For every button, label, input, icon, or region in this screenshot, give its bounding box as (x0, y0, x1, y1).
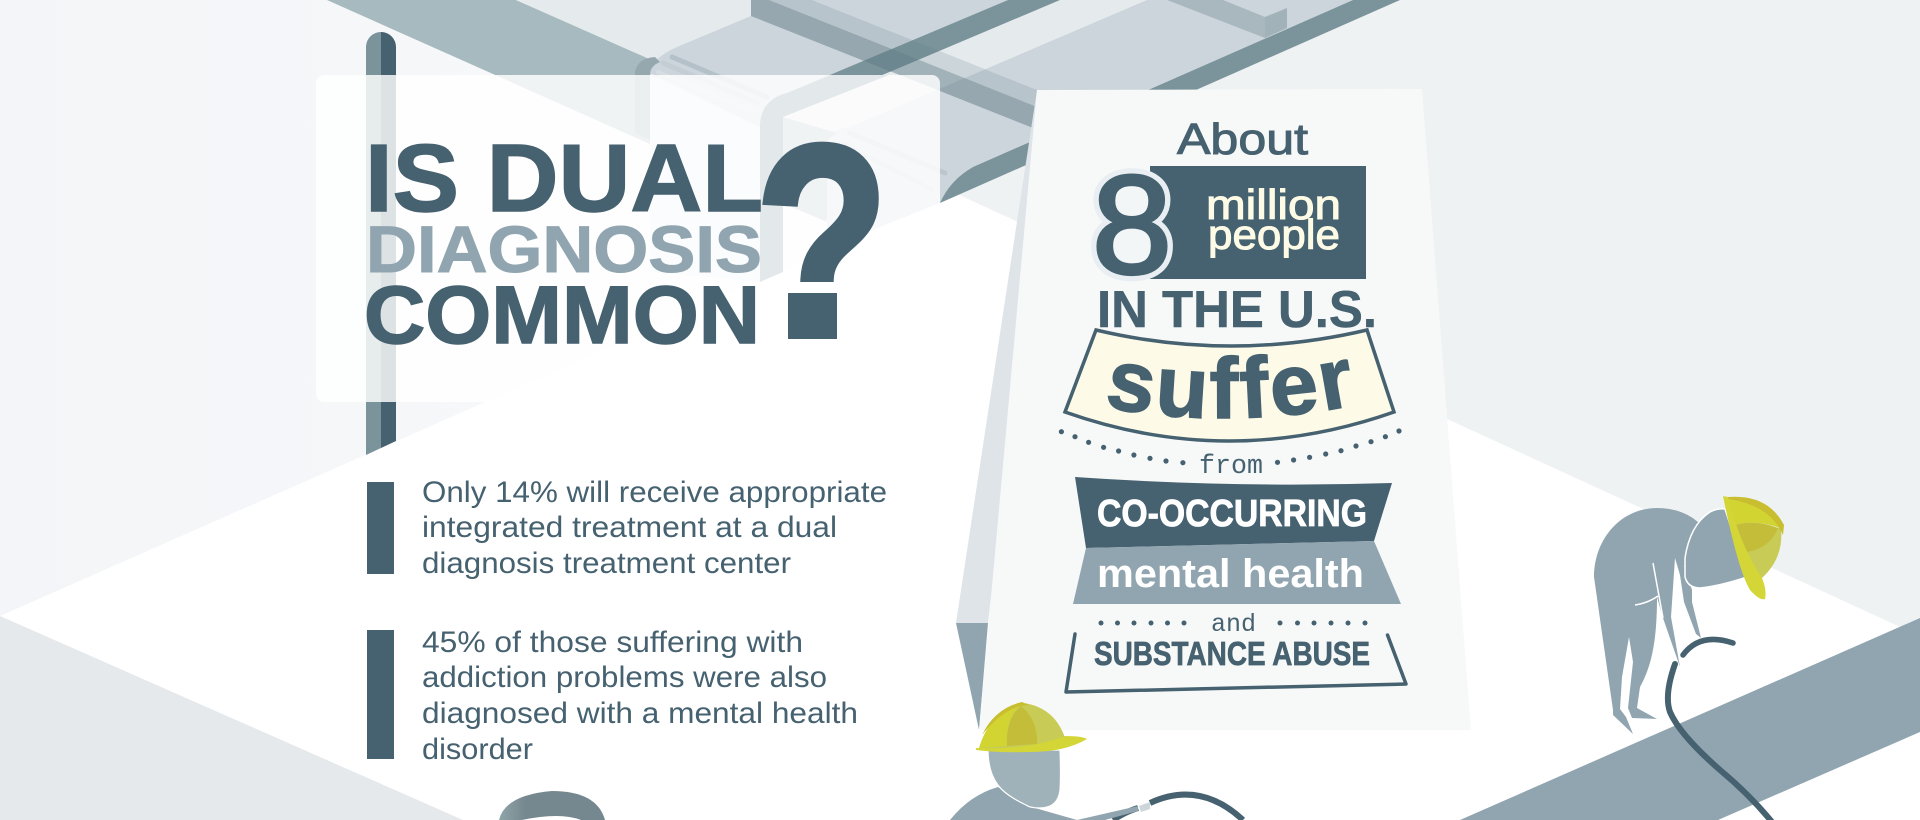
body (950, 787, 1138, 820)
8 million people: 8 (1092, 146, 1172, 303)
dots around from (1059, 428, 1402, 465)
fact: 14 percent: diagnosis treatment center (422, 547, 791, 580)
worker 2 (1594, 496, 1784, 820)
fact: 45 percent: diagnosed with a mental health (422, 697, 858, 730)
body seams (1635, 563, 1663, 618)
pole (366, 32, 396, 455)
fact: 14 percent: integrated treatment at a dual (422, 511, 837, 544)
fact: 45 percent: 45% of those suffering with (422, 626, 803, 659)
title: ? (755, 89, 889, 395)
and: and (1211, 610, 1256, 639)
co-occurring banner (1075, 477, 1392, 548)
suffer banner: suffer (1108, 354, 1350, 419)
8 million people: million (1206, 181, 1341, 228)
fact: 45 percent (367, 626, 858, 766)
substance abuse: SUBSTANCE ABUSE (1094, 635, 1370, 672)
title (364, 89, 889, 395)
hose (1113, 795, 1243, 820)
fact: 14 percent: Only 14% will receive appropriate (422, 476, 887, 509)
fact: 45 percent: disorder (422, 733, 533, 766)
title: IS DUAL (365, 125, 763, 232)
title: COMMON (364, 270, 760, 361)
worker 1 (950, 702, 1243, 820)
sign side face (956, 90, 1037, 623)
dots around and (1098, 620, 1368, 626)
title panel (316, 75, 940, 402)
head (988, 750, 1060, 808)
sign side tip (956, 623, 988, 730)
title: DIAGNOSIS (366, 212, 762, 286)
helmet (976, 702, 1087, 752)
body and legs (1594, 508, 1701, 734)
ceiling ducts (327, 0, 1400, 282)
mental health banner: mental health (1097, 552, 1364, 596)
8 million people (1092, 146, 1366, 303)
about: About (1177, 115, 1308, 164)
fact: 45 percent: addiction problems were also (422, 661, 827, 694)
sign face (979, 89, 1471, 730)
8 million people: people (1208, 211, 1340, 258)
mental health banner (1073, 541, 1401, 604)
sign (956, 90, 1408, 730)
from: from (1199, 451, 1263, 481)
co-occurring banner: CO-OCCURRING (1097, 493, 1367, 535)
in the u.s.: IN THE U.S. (1097, 281, 1377, 339)
hose arc bottom (499, 791, 605, 820)
grip (1139, 802, 1150, 812)
fact: 14 percent (367, 476, 887, 580)
head (1685, 509, 1747, 588)
helmet (1723, 496, 1784, 599)
hose (1668, 639, 1772, 820)
8 million people: 8 (1092, 146, 1172, 303)
substance abuse (1066, 634, 1406, 692)
